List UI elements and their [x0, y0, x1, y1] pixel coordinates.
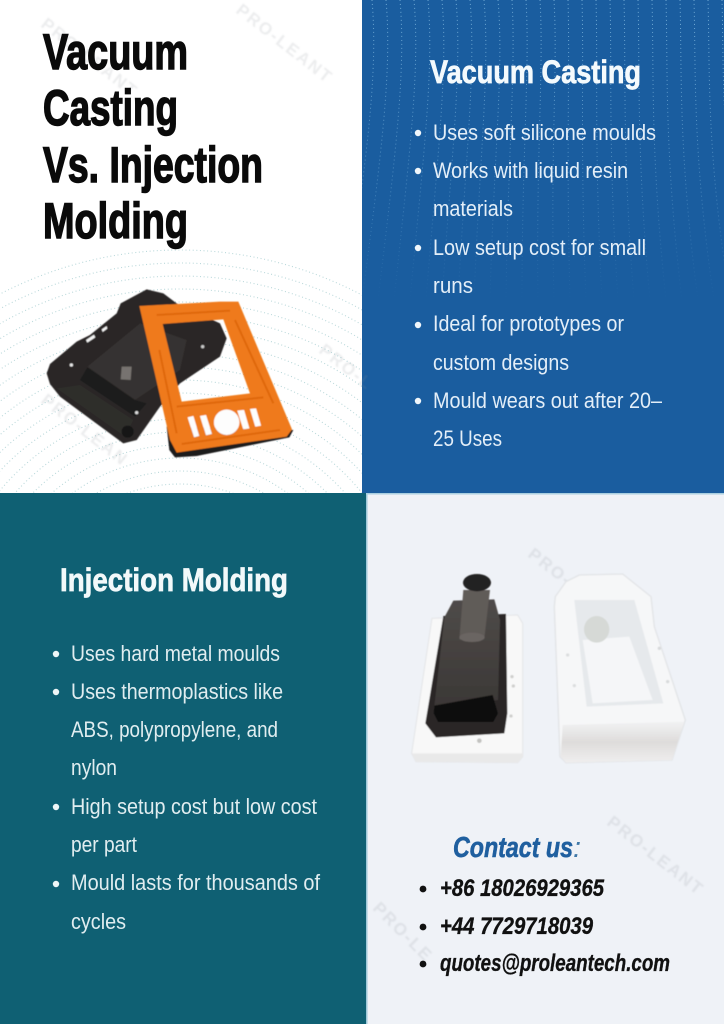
list: vacuum casting points: 25 Uses	[433, 426, 502, 451]
list: vacuum casting points: Ideal for prototypes or	[433, 311, 624, 336]
list: vacuum casting points: Works with liquid resin	[433, 158, 628, 183]
list: injection molding points: nylon	[71, 755, 117, 780]
title: Vacuum	[43, 24, 188, 80]
contact block: :	[573, 832, 581, 864]
contact block	[420, 832, 670, 977]
title: Molding	[43, 193, 188, 249]
photo: black housing with orange frame	[47, 289, 293, 457]
list: vacuum casting points: custom designs	[433, 350, 569, 375]
dark part	[425, 574, 507, 737]
list: injection molding points: cycles	[71, 909, 126, 934]
list: vacuum casting points: Low setup cost for small	[433, 235, 646, 260]
watermarks: PRO-LE	[369, 898, 437, 966]
white mould	[554, 574, 685, 763]
list: vacuum casting points: materials	[433, 196, 513, 221]
list: contact details: +86 18026929365	[440, 875, 605, 902]
watermarks: PRO-LEANT	[38, 14, 142, 101]
list: vacuum casting points	[415, 120, 663, 451]
panel: injection molding background	[0, 493, 366, 1024]
watermarks: PRO-LEANT	[233, 0, 337, 87]
panel text: injection molding	[53, 562, 321, 934]
title: Casting	[43, 80, 178, 136]
black frame backing	[167, 427, 293, 457]
list: vacuum casting points: Uses soft silicone moulds	[433, 120, 656, 145]
watermarks: PRO-LE	[525, 544, 596, 606]
white base	[412, 615, 523, 763]
photo: black part on white silicone base and white silicone mould	[412, 574, 685, 763]
list: injection molding points: ABS, polypropylene, and	[71, 717, 278, 742]
panel text: vacuum casting	[415, 54, 663, 451]
list: injection molding points	[53, 641, 321, 934]
heading: vacuum casting: Vacuum Casting	[430, 54, 641, 90]
heading: injection molding: Injection Molding	[60, 562, 288, 598]
list: contact details: +44 7729718039	[440, 913, 594, 940]
list: injection molding points: High setup cost but low cost	[71, 794, 317, 819]
panel: vacuum casting background	[362, 0, 724, 493]
watermarks: PRO-L	[316, 340, 377, 394]
heading: contact us: Contact us	[453, 832, 573, 864]
black housing	[47, 289, 227, 443]
orange frame	[139, 302, 292, 453]
title: Vs. Injection	[43, 137, 263, 193]
panel: contact and photo background	[366, 493, 724, 1024]
list: injection molding points: per part	[71, 832, 137, 857]
watermarks: PRO-LEAN	[38, 390, 132, 470]
title	[43, 24, 263, 249]
list: contact details	[420, 875, 670, 977]
list: vacuum casting points: runs	[433, 273, 473, 298]
list: injection molding points: Uses thermoplastics like	[71, 679, 283, 704]
list: injection molding points: Uses hard metal moulds	[71, 641, 280, 666]
list: vacuum casting points: Mould wears out after 20–	[433, 388, 663, 413]
list: injection molding points: Mould lasts for thousands of	[71, 870, 321, 895]
white showing through the frame	[188, 408, 261, 437]
panel: title and photo background	[0, 0, 362, 493]
watermarks: PRO-LEANT	[604, 812, 708, 899]
